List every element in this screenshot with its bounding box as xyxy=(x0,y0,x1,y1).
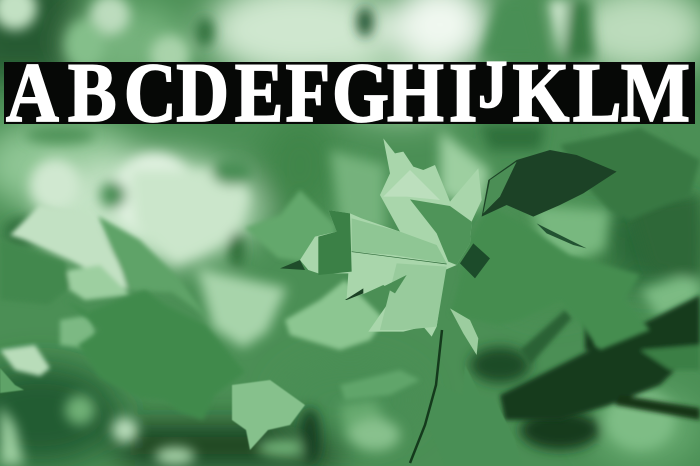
shaded parts of leaf xyxy=(318,210,352,275)
alphabet text: ABCDEFGHI xyxy=(6,46,477,140)
large mid leaf behind xyxy=(450,205,650,350)
thin stem xyxy=(410,330,442,463)
right lower leaf xyxy=(425,365,522,465)
black band xyxy=(4,62,695,124)
dark leaf upper right xyxy=(460,150,617,278)
soft-edged leaves xyxy=(0,190,700,420)
upper right leaf xyxy=(560,128,700,220)
main sunlit maple leaf xyxy=(280,138,482,355)
alphabet text: J xyxy=(478,46,507,122)
small edge leaves xyxy=(0,368,24,393)
big dark leaf lower left xyxy=(65,290,245,420)
sunlit small leaf lower left xyxy=(232,380,305,450)
title band xyxy=(4,46,695,140)
alphabet text: KLM xyxy=(513,46,690,140)
